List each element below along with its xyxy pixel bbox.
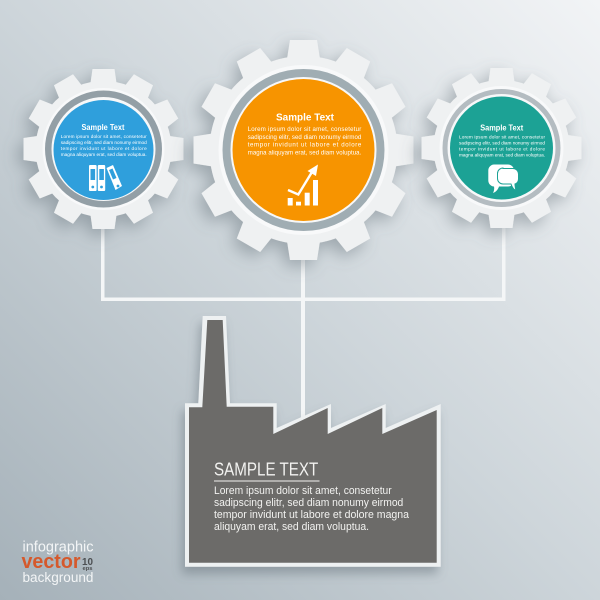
text: blue gear: magna aliquyam erat, sed diam voluptua. <box>61 152 147 157</box>
text: blue gear: Sample Text <box>82 123 125 132</box>
text: teal gear: Sample Text <box>480 124 523 132</box>
factory <box>185 316 441 567</box>
factory text: sadipscing elitr, sed diam nonumy eirmod <box>214 497 403 509</box>
text: orange gear: Lorem ipsum dolor sit amet, consetetur <box>248 126 361 133</box>
gear: teal <box>422 68 582 228</box>
text: blue gear: tempor invidunt ut labore et dolore <box>61 146 147 151</box>
icon: binders <box>89 165 122 191</box>
text: orange gear: Sample Text <box>276 112 334 124</box>
text: blue gear: Lorem ipsum dolor sit amet, consetetur <box>61 134 147 139</box>
text: orange gear <box>248 112 362 156</box>
text: teal gear: magna aliquyam erat, sed diam voluptua. <box>459 152 545 157</box>
logo: vector <box>22 551 81 573</box>
logo: background <box>22 570 94 585</box>
icon: speech bubbles <box>488 164 518 193</box>
factory text: SAMPLE TEXT <box>214 460 318 480</box>
text: orange gear: tempor invidunt ut labore et dolore <box>248 142 362 149</box>
text: blue gear <box>61 123 147 157</box>
text: blue gear: sadipscing elitr, sed diam nonumy eirmod <box>61 140 147 145</box>
text: teal gear: Lorem ipsum dolor sit amet, consetetur <box>459 134 545 139</box>
logo: eps <box>82 566 92 572</box>
logo: 10 <box>82 556 93 568</box>
connector lines <box>101 222 506 420</box>
logo <box>22 540 94 585</box>
factory text <box>214 460 410 533</box>
factory text: Lorem ipsum dolor sit amet, consetetur <box>214 485 392 497</box>
gear: blue <box>24 69 184 229</box>
logo: infographic <box>22 540 94 556</box>
gear: orange <box>194 40 414 260</box>
text: orange gear: sadipscing elitr, sed diam nonumy eirmod <box>248 134 361 141</box>
factory text: tempor invidunt ut labore et dolore magna <box>214 509 410 521</box>
text: teal gear: tempor invidunt ut labore et dolore <box>459 146 545 151</box>
text: teal gear <box>459 124 545 157</box>
icon: rising bar chart <box>288 164 318 206</box>
factory text: aliquyam erat, sed diam voluptua. <box>214 521 369 533</box>
text: orange gear: magna aliquyam erat, sed diam voluptua. <box>248 149 362 156</box>
text: teal gear: sadipscing elitr, sed diam nonumy eirmod <box>459 140 545 145</box>
